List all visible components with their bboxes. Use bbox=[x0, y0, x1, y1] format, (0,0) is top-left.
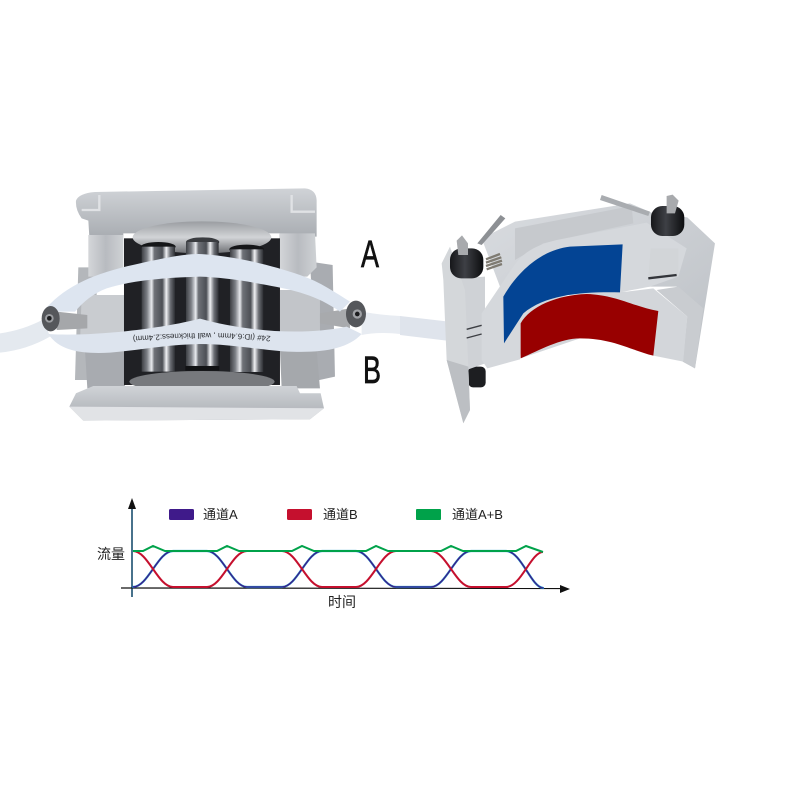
lower clamp arm bbox=[520, 288, 687, 362]
hinge joint line bbox=[648, 275, 677, 278]
right inner shadow bbox=[657, 287, 703, 368]
channel label A: A bbox=[361, 234, 379, 276]
y axis bbox=[128, 498, 136, 597]
flow chart bbox=[97, 498, 570, 610]
inlet tube bbox=[400, 316, 447, 341]
top disk bbox=[133, 221, 271, 253]
legend: channel B bbox=[287, 507, 358, 522]
right upper bracket bbox=[279, 233, 317, 277]
left connector cap bbox=[42, 306, 60, 331]
left upper bracket bbox=[88, 235, 123, 277]
lower silicone tube bbox=[48, 319, 362, 353]
back side blocks bbox=[75, 262, 335, 381]
hinge column bbox=[460, 277, 490, 370]
top plate bright rims bbox=[82, 195, 315, 212]
top mounting plate bbox=[76, 188, 317, 237]
legend: channel A bbox=[169, 507, 238, 522]
roller 1 bbox=[141, 242, 176, 372]
left outlet tube bbox=[0, 319, 50, 353]
bolt bottom bbox=[468, 367, 486, 387]
bottom disk bbox=[129, 371, 275, 392]
left lower bracket bbox=[85, 350, 125, 388]
channel B red highlight bbox=[521, 294, 658, 358]
left middle bracket bbox=[80, 295, 127, 343]
y axis title: 流量 bbox=[97, 546, 125, 562]
upper silicone tube bbox=[43, 254, 350, 312]
dark housing cavity bbox=[124, 238, 280, 385]
x axis bbox=[121, 585, 570, 593]
right lower bracket bbox=[280, 350, 320, 388]
hinge plate shaded edge bbox=[447, 360, 470, 423]
tube size label: 24# (ID:6.4mm , wall thickness:2.4mm) bbox=[133, 332, 270, 342]
left hinge grooves bbox=[467, 325, 482, 338]
curve: channel A bbox=[133, 551, 543, 588]
right knob bbox=[651, 195, 684, 236]
right occlusion bed photo bbox=[400, 195, 715, 423]
upper clamp arm bbox=[482, 223, 687, 368]
channel A blue highlight bbox=[503, 244, 623, 343]
hinge roller bbox=[648, 248, 678, 277]
channel label B: B bbox=[363, 350, 381, 392]
spring bbox=[486, 254, 502, 269]
right outlet tube bbox=[362, 312, 400, 335]
upper clamp pin bbox=[600, 195, 650, 216]
roller 3 bbox=[229, 245, 264, 372]
right connector cap bbox=[346, 301, 366, 327]
legend: channel B: 通道B bbox=[323, 507, 358, 522]
x axis title: 时间 bbox=[328, 594, 356, 610]
bottom mounting plate bbox=[69, 386, 324, 421]
left connector stem bbox=[57, 312, 87, 330]
tube size print bbox=[103, 333, 271, 339]
back plate shaded face bbox=[515, 206, 633, 260]
right connector stem bbox=[320, 308, 350, 328]
legend: channel A: 通道A bbox=[203, 507, 238, 522]
vertical hinge plate bbox=[442, 247, 470, 423]
left clamp pin bbox=[477, 215, 505, 245]
back plate bbox=[482, 203, 715, 368]
left pump head photo bbox=[0, 188, 400, 421]
left knob bbox=[450, 235, 483, 278]
curve: channel A+B bbox=[133, 546, 543, 552]
legend: channel A+B bbox=[416, 507, 503, 522]
roller 2 bbox=[185, 237, 219, 371]
legend: channel A+B: 通道A+B bbox=[452, 507, 503, 522]
right middle bracket bbox=[280, 290, 320, 343]
bottom plate front face bbox=[69, 407, 324, 421]
curve: channel B bbox=[133, 551, 543, 587]
